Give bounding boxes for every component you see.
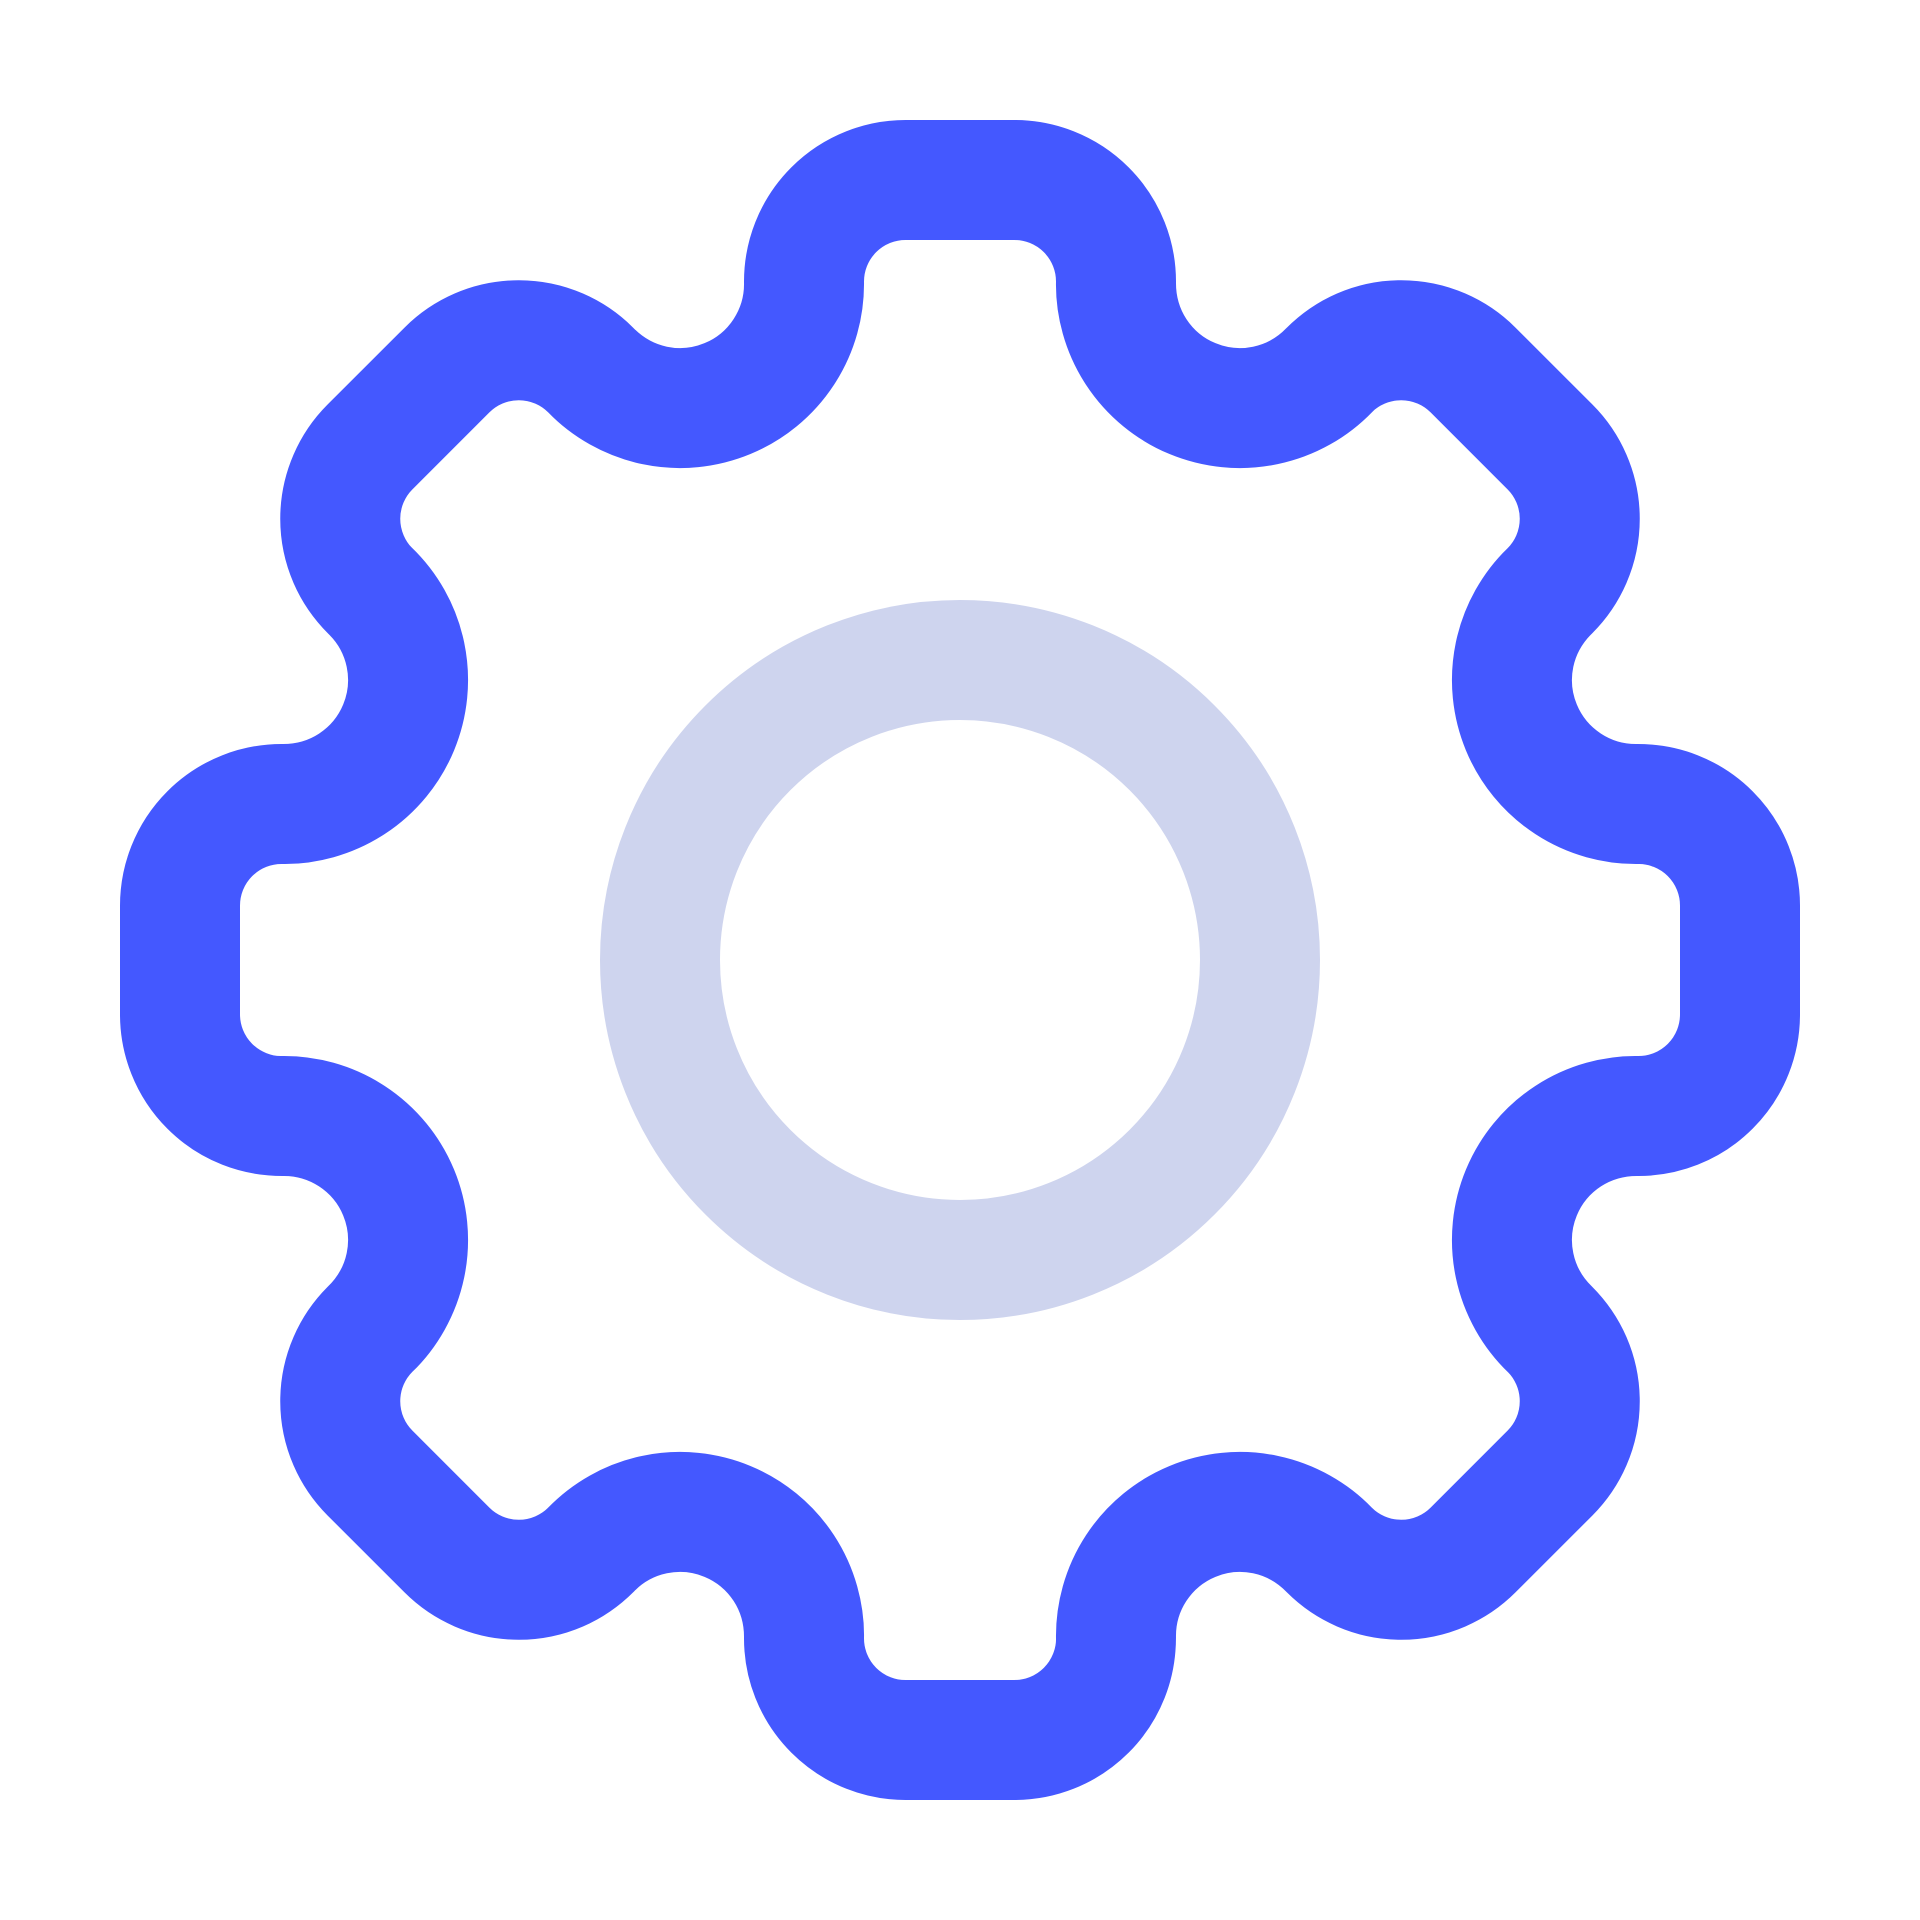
gear outline — [180, 180, 1740, 1740]
gear centre ring — [660, 660, 1260, 1260]
